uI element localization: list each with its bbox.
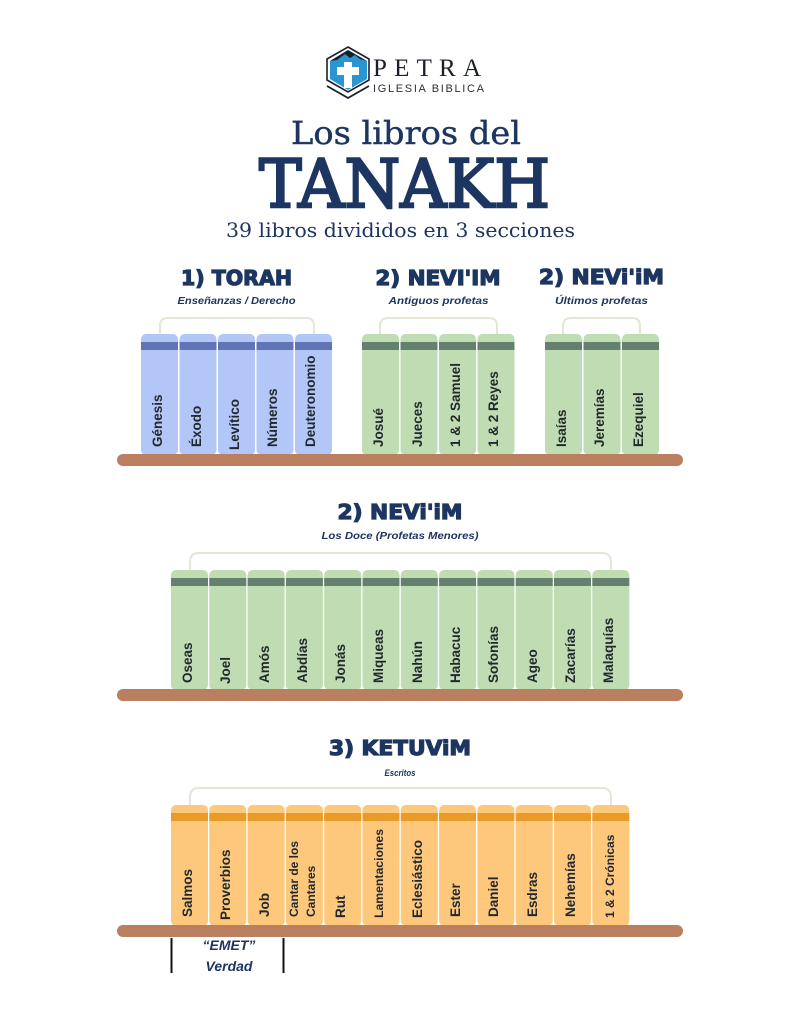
books: Ketuvim: Salmos <box>180 869 195 917</box>
books: Ketuvim: Nehemías <box>563 853 578 917</box>
books: Los Doce <box>171 570 629 690</box>
title: Los libros del: Los libros del <box>291 114 521 152</box>
books: Ketuvim: Job <box>257 893 272 917</box>
section heading: Torah <box>178 266 296 307</box>
books: Ultimos profetas: Jeremías <box>592 388 607 447</box>
books: Los Doce: Jonás <box>333 644 348 683</box>
section subheading: Escritos: Escritos <box>384 768 416 779</box>
bracket: Antiguos profetas <box>380 318 497 334</box>
section heading: Nevi'im ultimos <box>539 265 664 307</box>
books: Los Doce: Zacarías <box>563 628 578 683</box>
section heading: Nevi'im ultimos: 2) NEVi'iM <box>539 265 664 289</box>
shelf 2 <box>117 689 683 701</box>
books: Ketuvim: Rut <box>333 895 348 918</box>
books: Ketuvim: Ester <box>448 882 463 917</box>
books: Ultimos profetas: Isaías <box>554 409 569 447</box>
books: Ketuvim: Daniel <box>486 876 501 917</box>
books: Los Doce: Sofonías <box>486 626 501 683</box>
books: Los Doce: Joel <box>218 657 233 684</box>
books: Torah: Génesis <box>150 394 165 447</box>
section heading: Los Doce: 2) NEVi'iM <box>338 500 462 524</box>
section heading: Nevi'im antiguos: 2) NEVI'IM <box>376 266 500 290</box>
callout: EMET: Verdad <box>206 958 253 974</box>
books: Ketuvim <box>171 805 629 926</box>
books: Ketuvim: Eclesiástico <box>410 840 425 918</box>
bracket: Ultimos profetas <box>563 318 640 334</box>
books: Antiguos profetas: Jueces <box>410 401 425 447</box>
books: Los Doce: Nahún <box>410 641 425 683</box>
section subheading: Antiguos profetas: Antiguos profetas <box>387 295 489 307</box>
books: Los Doce: Amós <box>257 645 272 683</box>
books: Los Doce: Oseas <box>180 642 195 683</box>
books: Los Doce: Abdías <box>295 638 310 683</box>
section heading: Ketuvim <box>329 736 471 779</box>
books: Los Doce: Habacuc <box>448 626 463 683</box>
books: Ketuvim: 1 & 2 Crónicas <box>603 834 617 918</box>
books: Antiguos profetas <box>362 334 514 455</box>
section subheading: Torah: Enseñanzas / Derecho <box>178 295 296 307</box>
books: Los Doce: Malaquías <box>601 618 616 683</box>
section subheading: Ultimos profetas: Últimos profetas <box>555 294 648 307</box>
bracket: Los Doce <box>190 553 611 570</box>
logo tagline: IGLESIA BIBLICA <box>373 83 485 95</box>
bracket: Ketuvim <box>190 788 611 805</box>
icon: hexagon cross <box>327 47 369 98</box>
books: Antiguos profetas: 1 & 2 Samuel <box>448 363 463 447</box>
books: Torah <box>141 334 332 455</box>
books: Los Doce: Miqueas <box>371 629 386 683</box>
books: Ketuvim: Cantares <box>304 865 318 917</box>
books: Ultimos profetas <box>545 334 659 455</box>
books: Ketuvim: Cantar de los <box>287 841 301 917</box>
section subheading: Los Doce: Los Doce (Profetas Menores) <box>322 530 479 542</box>
shelf 1 <box>117 454 683 466</box>
books: Antiguos profetas: 1 & 2 Reyes <box>486 371 501 447</box>
subtitle: 39 libros divididos en 3 secciones <box>226 219 575 242</box>
books: Antiguos profetas: Josué <box>371 407 386 447</box>
section heading: Torah: 1) TORAH <box>181 266 292 290</box>
books: Ketuvim: Lamentaciones <box>372 829 386 918</box>
title: TANAKH: TANAKH <box>259 146 550 223</box>
books: Ketuvim: Esdras <box>525 872 540 917</box>
callout: EMET <box>170 937 284 974</box>
section heading: Los Doce <box>322 500 479 542</box>
books: Torah: Éxodo <box>189 406 204 447</box>
section heading: Nevi'im antiguos <box>376 266 500 307</box>
books: Torah: Deuteronomio <box>303 355 318 447</box>
section heading: Ketuvim: 3) KETUViM <box>329 736 471 760</box>
books: Ultimos profetas: Ezequiel <box>631 392 646 447</box>
logo wordmark: PETRA <box>373 55 481 82</box>
bracket: Torah <box>160 318 314 334</box>
logo: Petra Iglesia Biblica <box>327 47 485 98</box>
books: Ketuvim: Proverbios <box>218 849 233 920</box>
callout: EMET: “EMET” <box>203 937 255 953</box>
books: Torah: Números <box>265 388 280 447</box>
books: Los Doce: Ageo <box>525 649 540 683</box>
shelf 3 <box>117 925 683 937</box>
books: Torah: Levítico <box>227 399 242 450</box>
